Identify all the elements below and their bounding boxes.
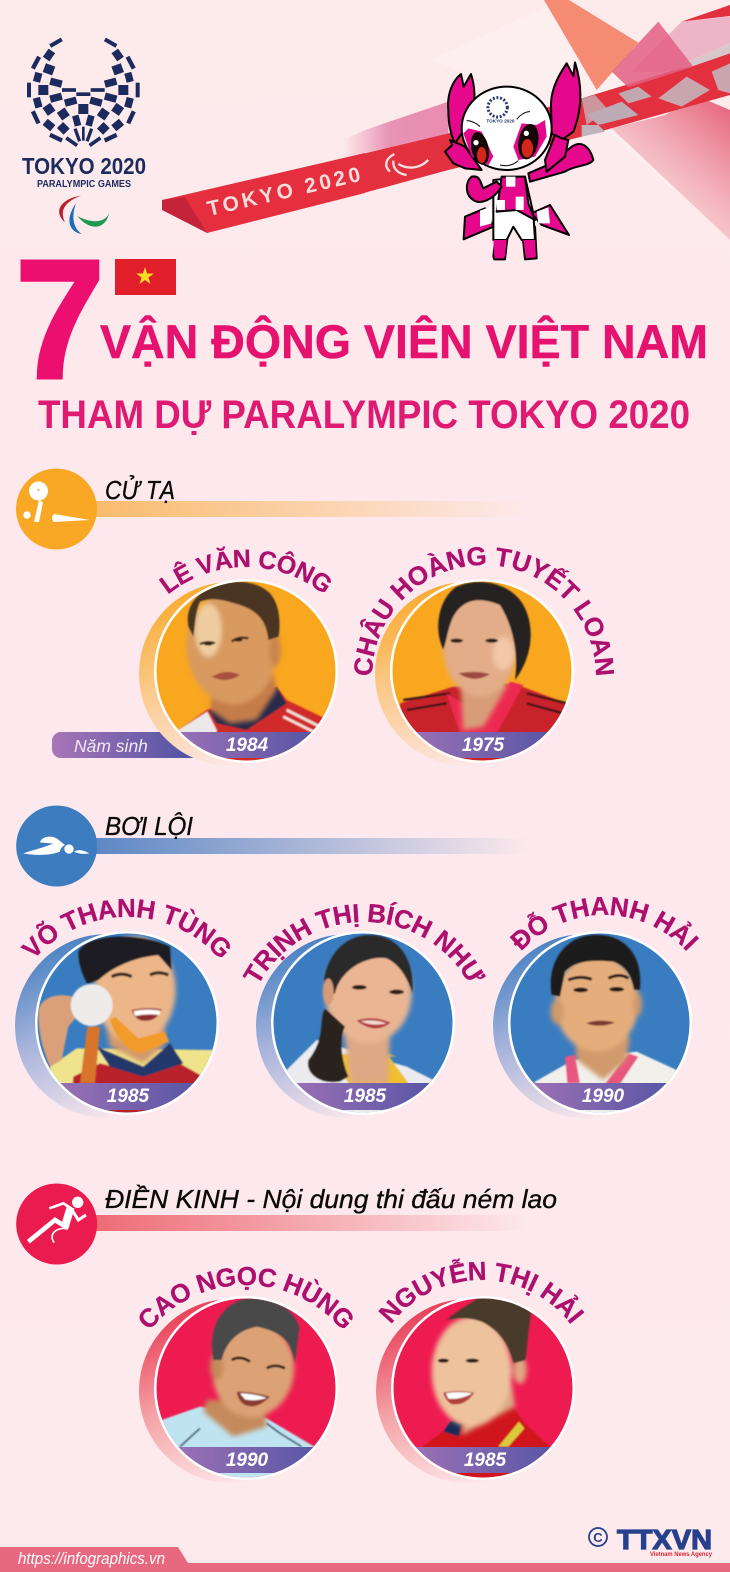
year band	[416, 1447, 550, 1473]
heading: ĐIỀN KINH - Nội dung thi đấu ném lao	[105, 1184, 557, 1214]
mascot forehead label: TOKYO 2020	[486, 118, 515, 123]
icon: weightlifter	[16, 468, 97, 550]
curved name: LÊ VĂN CÔNG	[158, 546, 331, 594]
icon: runner	[16, 1183, 97, 1264]
athlete: Nguyễn Thị Hải	[376, 1258, 584, 1482]
birth year label	[52, 732, 202, 758]
curved name: CHÂU HOÀNG TUYẾT LOAN	[354, 546, 614, 676]
photo	[38, 934, 216, 1112]
athlete: Võ Thanh Tùng	[15, 898, 257, 1118]
year band: 1984	[226, 735, 269, 756]
logo emblem	[27, 38, 140, 147]
section bar	[90, 501, 530, 517]
ribbon: Tokyo 2020 red band	[162, 153, 366, 233]
year band	[180, 732, 312, 758]
title line 1: VẬN ĐỘNG VIÊN VIỆT NAM	[100, 315, 708, 368]
copyright TTXVN logo: TTXVN	[617, 1524, 712, 1555]
curved name: ĐỖ THANH HẢI	[510, 896, 700, 951]
photo	[392, 582, 572, 760]
mascot: Someity	[445, 62, 593, 259]
section: athletics	[16, 1183, 557, 1264]
title line 2: THAM DỰ PARALYMPIC TOKYO 2020	[38, 393, 690, 437]
section: weightlifting	[16, 468, 530, 550]
year band	[416, 732, 548, 758]
year band	[60, 1083, 194, 1110]
photo	[394, 1298, 572, 1478]
curved name: CAO NGỌC HÙNG	[140, 1266, 353, 1328]
section: swimming	[16, 805, 530, 886]
athlete: Cao Ngọc Hùng	[139, 1266, 396, 1482]
year band: 1985	[107, 1086, 150, 1107]
photo	[274, 934, 452, 1112]
year band: 1975	[462, 735, 505, 756]
year band: 1985	[344, 1086, 387, 1107]
logo wordmark: TOKYO 2020	[22, 153, 146, 179]
copyright TTXVN logo: Vietnam News Agency	[650, 1552, 713, 1558]
icon: Vietnam flag	[115, 259, 176, 295]
year band	[296, 1083, 430, 1110]
athlete: Lê Văn Công	[52, 546, 338, 766]
icon: swimmer	[16, 805, 97, 886]
section bar	[90, 838, 530, 854]
year band: 1990	[226, 1450, 269, 1471]
athlete: Đỗ Thanh Hải	[493, 896, 700, 1118]
curved name: TRỊNH THỊ BÍCH NHƯ	[242, 902, 486, 981]
logo agitos	[59, 196, 109, 234]
Tokyo 2020 Paralympic logo	[22, 38, 146, 234]
section bar	[90, 1215, 530, 1231]
birth year label: Năm sinh	[74, 736, 148, 756]
ribbon: white agitos symbol	[386, 154, 428, 175]
copyright TTXVN logo	[589, 1524, 713, 1558]
photo	[510, 934, 690, 1112]
curved name: VÕ THANH TÙNG	[20, 898, 230, 958]
copyright TTXVN logo: C	[593, 1530, 603, 1545]
athlete: Châu Hoàng Tuyết Loan	[354, 546, 614, 766]
footer bar with URL	[0, 1547, 730, 1572]
year band: 1990	[582, 1086, 625, 1107]
heading: BƠI LỘI	[105, 811, 193, 841]
photo	[156, 582, 336, 760]
logo subtitle: PARALYMPIC GAMES	[37, 179, 131, 190]
year band: 1985	[464, 1450, 507, 1471]
title number 7: 7	[15, 225, 105, 415]
ribbon label: TOKYO 2020	[205, 163, 366, 221]
curved name: NGUYỄN THỊ HẢI	[378, 1258, 584, 1324]
header decoration: ribbons and triangles	[162, 0, 730, 240]
athlete: Trịnh Thị Bích Như	[242, 902, 486, 1118]
photo	[156, 1298, 336, 1478]
footer bar with URL: https://infographics.vn	[18, 1549, 165, 1568]
year band	[178, 1447, 314, 1473]
year band	[534, 1083, 666, 1110]
heading: CỬ TẠ	[105, 474, 175, 505]
